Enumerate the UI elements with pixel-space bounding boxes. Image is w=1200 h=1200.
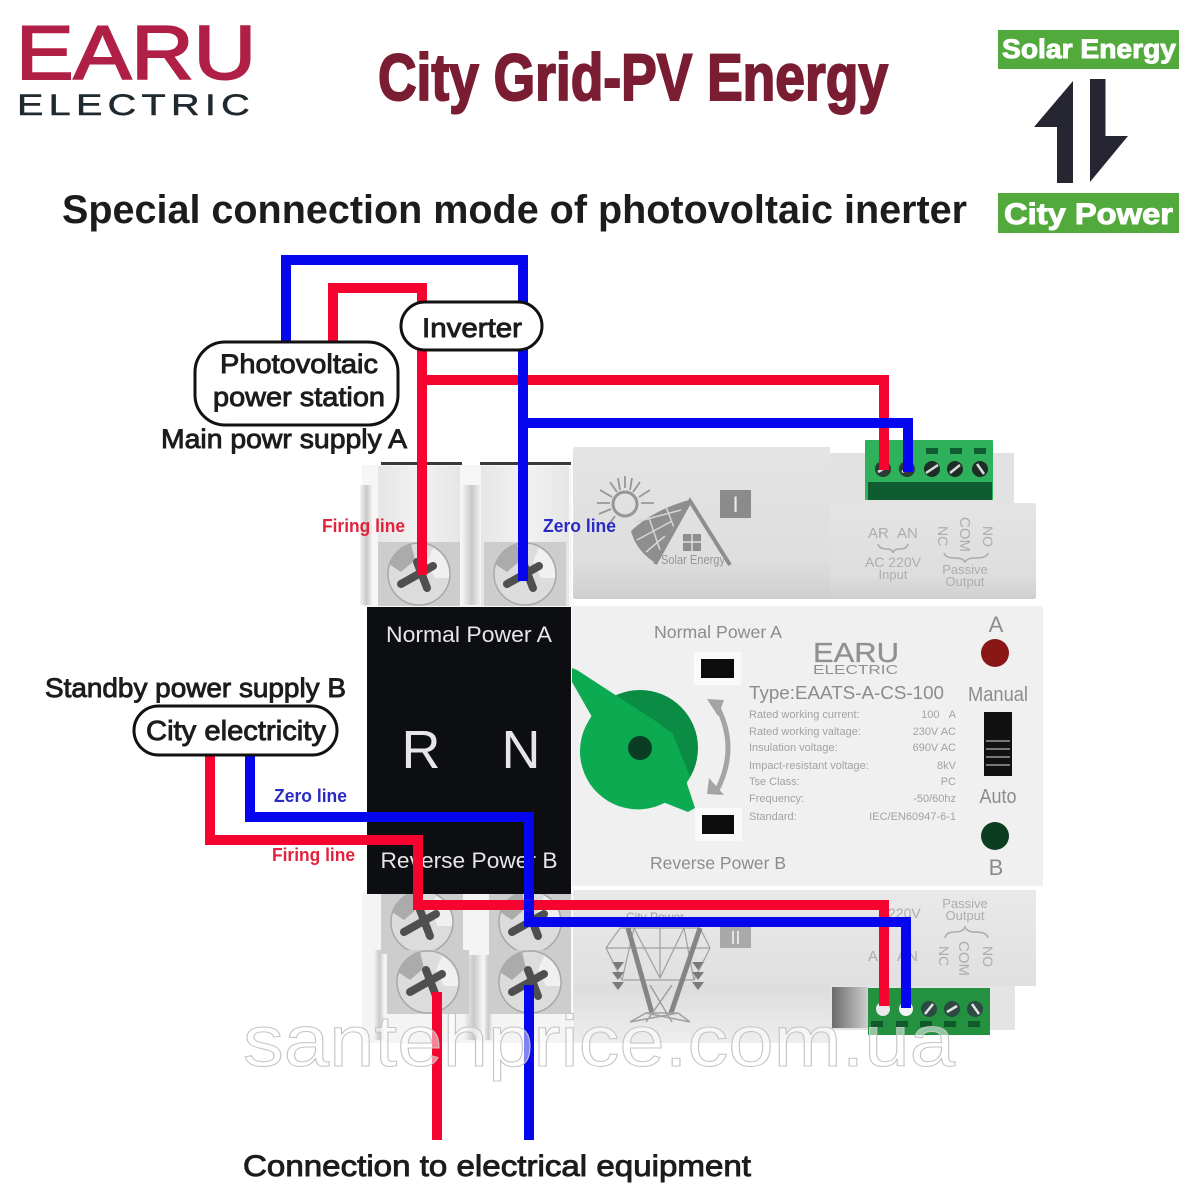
upper module: solar input [573, 447, 1036, 599]
spec table: 100 A [921, 709, 957, 721]
label: Zero line left: Zero line [274, 786, 347, 806]
watermark: santehprice.com.ua [243, 1002, 956, 1082]
badge: Solar Energy: Solar Energy [1002, 34, 1176, 64]
title: City Grid-PV Energy [378, 40, 888, 114]
icon: module I: I [732, 492, 739, 517]
black label panel: N [502, 720, 540, 780]
pill: Photovoltaic power station: power station [213, 382, 385, 412]
pill: City electricity [134, 706, 337, 755]
pill: Inverter [401, 302, 542, 350]
spec table: Insulation voltage: [749, 742, 838, 754]
spec table: 690V AC [913, 742, 956, 754]
input and output labels: AR [868, 525, 889, 542]
input and output labels: AR [868, 948, 889, 965]
wiring: city zero line (blue) [250, 750, 906, 1008]
icon: module II: II [730, 928, 741, 948]
label: Firing line left: Firing line [272, 845, 355, 865]
window: bottom indicator [695, 808, 742, 841]
wiring: PV zero line (blue) [286, 260, 908, 581]
icon: opposing arrows [1034, 79, 1128, 183]
wiring: load firing line (red) [432, 992, 442, 1140]
terminal screw: top N [484, 542, 566, 606]
manual auto switch [968, 684, 1028, 808]
spec table: Type:EAATS-A-CS-100 [749, 683, 944, 703]
input and output labels: NC [936, 946, 952, 966]
text: Reverse Power B: Reverse Power B [650, 853, 786, 873]
badge: solar and city power exchange [998, 30, 1179, 233]
terminal screw: bottom N upper [489, 890, 571, 954]
spec table: IEC/EN60947-6-1 [869, 811, 956, 823]
spec table: Frequency: [749, 793, 804, 805]
icon: module I [720, 490, 751, 518]
black label panel [367, 607, 571, 894]
spec table: PC [941, 776, 956, 788]
label: Main power supply A: Main powr supply A [161, 424, 407, 454]
window: top indicator [694, 652, 741, 685]
input and output labels: NO [980, 946, 996, 967]
icon: house with solar roof: Solar Energy [661, 553, 726, 567]
input and output labels: AN [897, 948, 918, 965]
input and output labels: Passive [942, 896, 988, 911]
badge: City Power: City Power [1004, 198, 1173, 231]
small logo: EARU [813, 637, 899, 668]
device: dual power transfer switch [360, 440, 1043, 1043]
lower module: city input [573, 890, 1036, 1043]
terminal screw: bottom R upper [381, 890, 463, 954]
terminal block: bottom green [868, 988, 990, 1035]
spec table: 230V AC [913, 726, 956, 738]
pill: City electricity: City electricity [146, 715, 326, 746]
indicator B [981, 822, 1009, 880]
manual auto switch: Manual [968, 684, 1028, 706]
icon: sun [597, 476, 654, 527]
indicator B: B [989, 855, 1003, 880]
black label panel: Normal Power A [386, 622, 552, 647]
left terminal housing, top [360, 462, 572, 607]
input and output labels [865, 517, 996, 589]
spec table: Impact-resistant voltage: [749, 760, 869, 772]
terminal screw: bottom N lower [489, 950, 571, 1014]
pill: Photovoltaic power station: Photovoltaic [220, 349, 378, 379]
spec table: 8kV [937, 760, 957, 772]
label: Zero line top: Zero line [543, 516, 616, 536]
spec table [749, 683, 957, 823]
centre module [572, 606, 1043, 886]
spec table: Rated working valtage: [749, 726, 861, 738]
indicator A: A [989, 612, 1004, 637]
wiring: city firing line (red) [210, 750, 884, 1006]
spec table: Rated working current: [749, 709, 860, 721]
input and output labels: Passive [942, 562, 988, 577]
input and output labels: COM [955, 941, 972, 976]
indicator A [981, 612, 1009, 667]
icon: pylon: City Power [626, 910, 684, 924]
icon: module II [720, 927, 751, 948]
black label panel: R [402, 720, 440, 780]
logo: EARU Electric: ELECTRIC [17, 89, 255, 122]
input and output labels: AC 220V [865, 554, 922, 570]
left terminal housing, bottom [362, 893, 572, 1043]
label: Standby power supply B: Standby power supply B [45, 673, 346, 703]
terminal block: top green [865, 440, 993, 500]
input and output labels: Output [945, 908, 985, 923]
input and output labels: NO [980, 526, 996, 547]
black label panel: Reverse Power B [380, 848, 558, 873]
input and output labels: Input [879, 567, 908, 582]
manual auto switch: Auto [980, 786, 1016, 808]
pill: Inverter: Inverter [422, 313, 522, 343]
input and output labels: 220V [888, 905, 921, 921]
terminal screw: top R [378, 542, 460, 606]
rotary handle [572, 668, 698, 812]
input and output labels: COM [956, 517, 973, 552]
pill: Photovoltaic power station [195, 342, 398, 425]
input and output labels: Output [945, 574, 985, 589]
icon: pylon [606, 910, 710, 1022]
input and output labels: NC [935, 526, 951, 546]
wiring: load zero line (blue) [524, 985, 534, 1140]
logo: EARU Electric: EARU [16, 11, 256, 96]
spec table: Standard: [749, 811, 797, 823]
spec table: -50/60hz [913, 793, 956, 805]
label: Firing line top: Firing line [322, 516, 405, 536]
icon: house with solar roof [631, 500, 730, 567]
wiring: PV firing line (red) [333, 288, 884, 575]
terminal screw: bottom R lower [387, 950, 469, 1014]
small logo: ELECTRIC [813, 662, 898, 677]
input and output labels [868, 896, 996, 976]
spec table: Tse Class: [749, 776, 800, 788]
logo: EARU Electric [16, 11, 256, 122]
input and output labels: AN [897, 525, 918, 542]
icon: rotation arrow [707, 699, 728, 795]
text: Normal Power A: Normal Power A [654, 622, 782, 642]
caption: Connection to electrical equipment: Connection to electrical equipment [243, 1150, 752, 1183]
heading: Special connection mode of photovoltaic inerter [62, 188, 967, 232]
